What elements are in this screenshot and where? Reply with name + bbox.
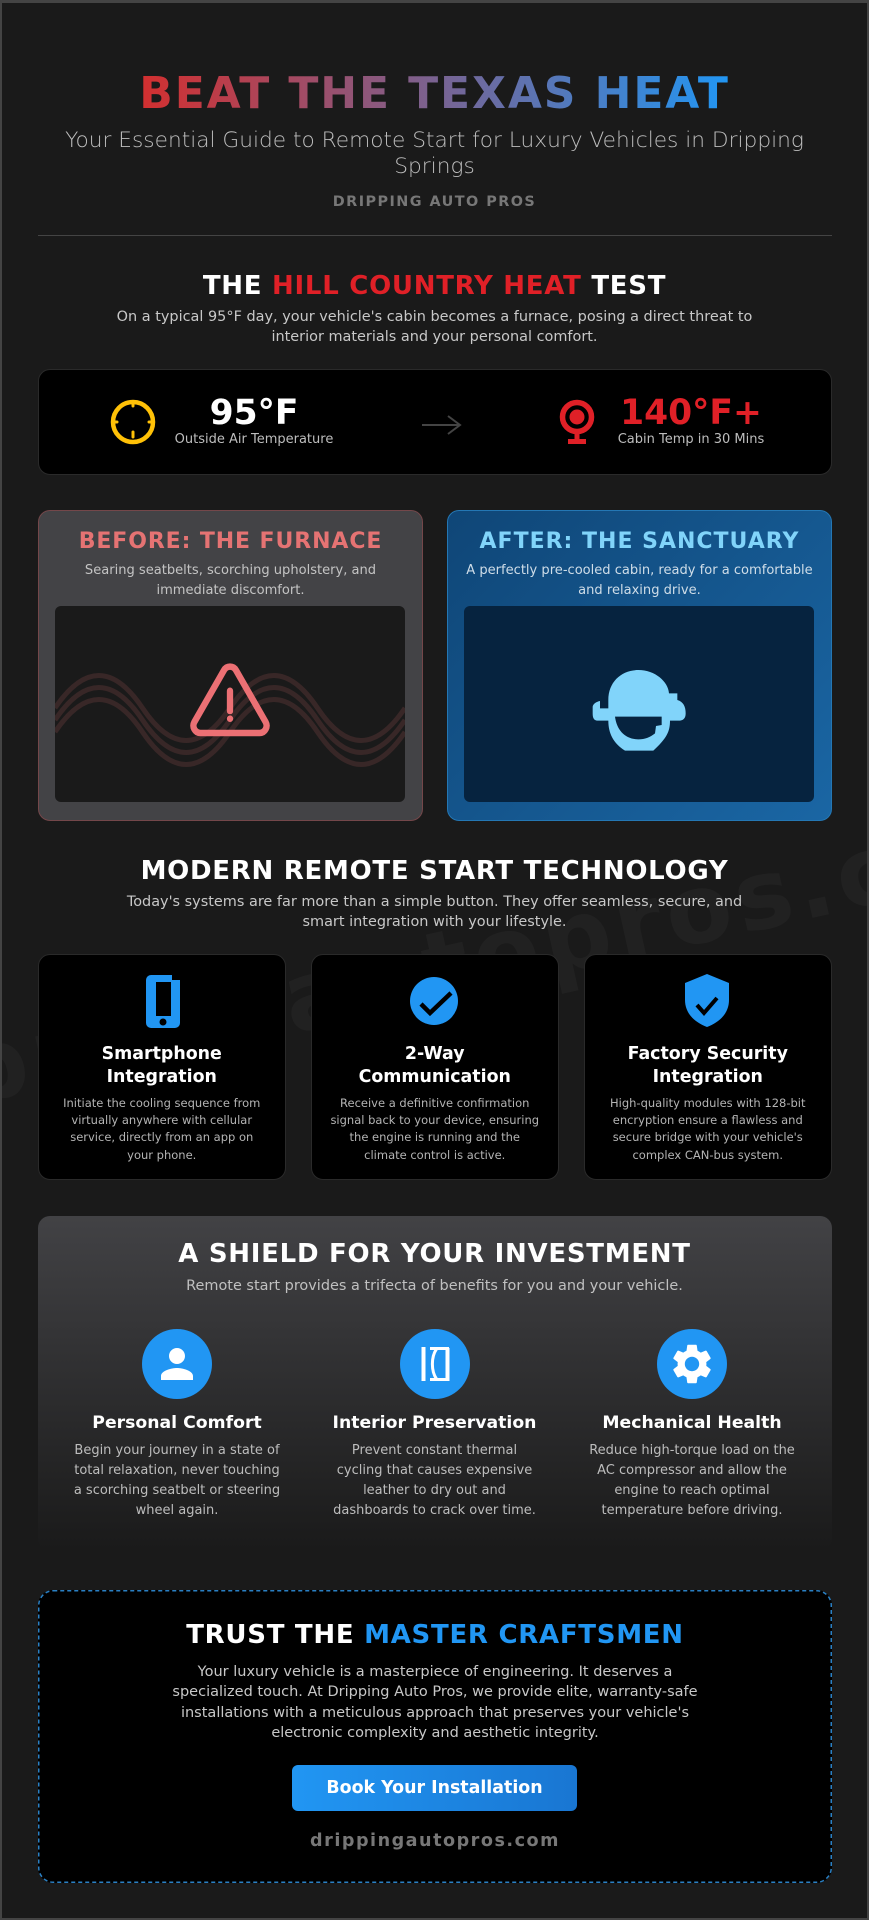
card: 2-way communication bbox=[310, 954, 559, 1180]
heading: modern remote start technology: MODERN REMOTE START TECHNOLOGY bbox=[141, 856, 728, 886]
title: Factory Security bbox=[628, 1044, 788, 1064]
text: after bbox=[466, 562, 813, 598]
value 140F: 140°F+ bbox=[620, 393, 762, 433]
description: signal back to your device, ensuring bbox=[330, 1113, 539, 1127]
icon: check circle bbox=[410, 977, 458, 1025]
description: the engine is running and the bbox=[350, 1130, 520, 1144]
text: cta body bbox=[172, 1664, 698, 1741]
title: Integration bbox=[107, 1067, 217, 1087]
description: leather to dry out and bbox=[363, 1483, 506, 1498]
description: AC compressor and allow the bbox=[597, 1463, 787, 1478]
description: Reduce high-torque load on the bbox=[589, 1442, 795, 1458]
text: cta body: electronic complexity and aesthetic integrity. bbox=[271, 1725, 599, 1741]
card: factory security integration bbox=[584, 954, 832, 1180]
description: engine to reach optimal bbox=[614, 1483, 770, 1498]
description: complex CAN-bus system. bbox=[632, 1148, 783, 1162]
intro text bbox=[117, 309, 752, 345]
description: secure bridge with your vehicle's bbox=[613, 1130, 803, 1144]
card: smartphone integration bbox=[38, 954, 286, 1180]
subtitle: Springs bbox=[394, 154, 475, 179]
panel: shield for your investment bbox=[38, 1216, 832, 1551]
button: Book Your Installation bbox=[326, 1778, 543, 1798]
description bbox=[74, 1442, 280, 1518]
subtitle bbox=[65, 128, 804, 179]
visual: furnace bbox=[55, 606, 405, 802]
icon: gear bbox=[657, 1329, 727, 1399]
icon: red pin bbox=[560, 400, 594, 444]
description: virtually anywhere with cellular bbox=[71, 1113, 252, 1127]
title: Personal Comfort bbox=[92, 1413, 262, 1433]
benefit: interior preservation bbox=[333, 1329, 536, 1518]
panel: temperature stats bbox=[38, 369, 832, 475]
description: your phone. bbox=[127, 1148, 196, 1162]
intro text: interior materials and your personal comfort. bbox=[271, 329, 598, 345]
header bbox=[65, 68, 804, 210]
icon: phone bbox=[146, 975, 180, 1028]
description: temperature before driving. bbox=[602, 1503, 782, 1518]
description bbox=[333, 1442, 536, 1518]
text: before: immediate discomfort. bbox=[156, 583, 305, 598]
panel: call to action bbox=[38, 1590, 832, 1883]
icon: warning triangle bbox=[190, 663, 270, 736]
benefit: personal comfort bbox=[74, 1329, 280, 1518]
description: Initiate the cooling sequence from bbox=[63, 1096, 260, 1110]
title: Integration bbox=[653, 1067, 763, 1087]
brand name: DRIPPING AUTO PROS bbox=[333, 194, 536, 210]
heading: before: BEFORE: THE FURNACE bbox=[79, 529, 382, 554]
text: before: Searing seatbelts, scorching upholstery, and bbox=[85, 562, 376, 578]
icon: sun gauge bbox=[110, 400, 156, 444]
description: wheel again. bbox=[136, 1503, 218, 1518]
description: cycling that causes expensive bbox=[337, 1463, 532, 1478]
text: before bbox=[85, 562, 376, 598]
description: Prevent constant thermal bbox=[352, 1442, 517, 1458]
panel: before bbox=[38, 510, 423, 821]
title: Smartphone bbox=[102, 1044, 222, 1064]
icon: cool head bbox=[592, 670, 686, 751]
text: technology intro bbox=[126, 894, 742, 930]
description bbox=[589, 1442, 795, 1518]
icon: shield bbox=[685, 974, 729, 1027]
description: climate control is active. bbox=[364, 1148, 505, 1162]
description: total relaxation, never touching bbox=[74, 1463, 280, 1478]
description bbox=[610, 1096, 806, 1162]
title: 2-Way bbox=[405, 1044, 465, 1064]
text: technology intro: Today's systems are far more than a simple button. They offer seamless, secure, and bbox=[127, 894, 742, 910]
benefit: mechanical health bbox=[589, 1329, 795, 1518]
heat waves bbox=[55, 673, 405, 767]
stat: outside temperature bbox=[175, 393, 333, 447]
icon: interior bbox=[400, 1329, 470, 1399]
text: cta body: specialized touch. At Dripping Auto Pros, we provide elite, warranty-safe bbox=[172, 1684, 698, 1700]
description: Receive a definitive confirmation bbox=[340, 1096, 529, 1110]
description: encryption ensure a flawless and bbox=[613, 1113, 803, 1127]
text: cta body: Your luxury vehicle is a masterpiece of engineering. It deserves a bbox=[198, 1664, 672, 1680]
title bbox=[359, 1044, 511, 1087]
website: drippingautopros.com bbox=[310, 1831, 560, 1851]
label: Cabin Temp in 30 Mins bbox=[618, 432, 764, 447]
title: Mechanical Health bbox=[602, 1413, 782, 1433]
text: after: A perfectly pre-cooled cabin, ready for a comfortable bbox=[466, 562, 813, 578]
text: shield intro: Remote start provides a trifecta of benefits for you and your vehicle. bbox=[186, 1278, 683, 1294]
label: Outside Air Temperature bbox=[175, 432, 333, 447]
title bbox=[102, 1044, 222, 1087]
heading: after: AFTER: THE SANCTUARY bbox=[480, 529, 799, 554]
heading: shield: A SHIELD FOR YOUR INVESTMENT bbox=[178, 1239, 691, 1269]
text: technology intro: smart integration with your lifestyle. bbox=[302, 914, 566, 930]
text: after: and relaxing drive. bbox=[578, 583, 701, 598]
icon: person bbox=[142, 1329, 212, 1399]
stat: cabin temperature bbox=[618, 393, 764, 447]
arrow bbox=[422, 415, 462, 435]
button bbox=[292, 1765, 577, 1811]
title: BEAT THE TEXAS HEAT bbox=[139, 68, 730, 119]
description: High-quality modules with 128-bit bbox=[610, 1096, 805, 1110]
heading: master craftsmen: TRUST THE MASTER CRAFTSMEN bbox=[186, 1620, 684, 1650]
value 95F: 95°F bbox=[210, 393, 298, 433]
description: Begin your journey in a state of bbox=[74, 1442, 280, 1458]
subtitle: Your Essential Guide to Remote Start for Luxury Vehicles in Dripping bbox=[65, 128, 804, 153]
title bbox=[628, 1044, 788, 1087]
intro text: On a typical 95°F day, your vehicle's cabin becomes a furnace, posing a direct threat to bbox=[117, 309, 752, 325]
description: a scorching seatbelt or steering bbox=[74, 1483, 280, 1498]
text: cta body: installations with a meticulous approach that preserves your vehicle's bbox=[181, 1705, 689, 1721]
description bbox=[330, 1096, 539, 1162]
title: Communication bbox=[359, 1067, 511, 1087]
description bbox=[63, 1096, 260, 1162]
title: Interior Preservation bbox=[333, 1413, 536, 1433]
description: service, directly from an app on bbox=[70, 1130, 253, 1144]
description: dashboards to crack over time. bbox=[333, 1503, 536, 1518]
panel: after bbox=[447, 510, 832, 821]
heading: hill country heat test: THE HILL COUNTRY HEAT TEST bbox=[203, 271, 666, 301]
visual: sanctuary bbox=[464, 606, 814, 802]
